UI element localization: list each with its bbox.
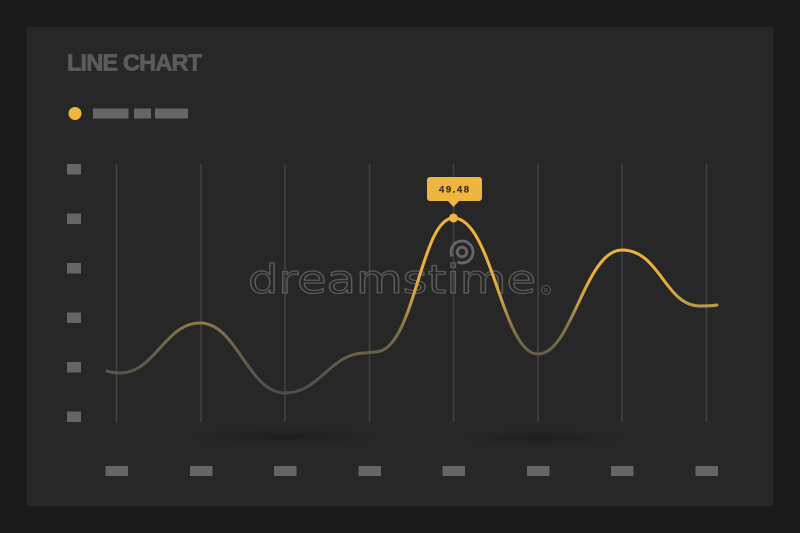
watermark: dreamstime [248,258,536,303]
grid lines [116,164,706,422]
floor shadows [187,428,623,446]
icon: legend dot [68,107,82,120]
data line [107,218,717,393]
callout [427,177,482,207]
y axis labels [67,164,81,422]
watermark [248,241,550,303]
icon: registered mark [542,286,550,294]
icon: registered mark: R [544,288,549,294]
legend [68,107,188,120]
title: LINE CHART [67,50,203,76]
icon: spiral [451,241,473,263]
x axis labels [106,466,718,476]
callout value: 49.48 [439,184,469,196]
data point marker [449,214,458,222]
legend label placeholder [93,108,188,118]
